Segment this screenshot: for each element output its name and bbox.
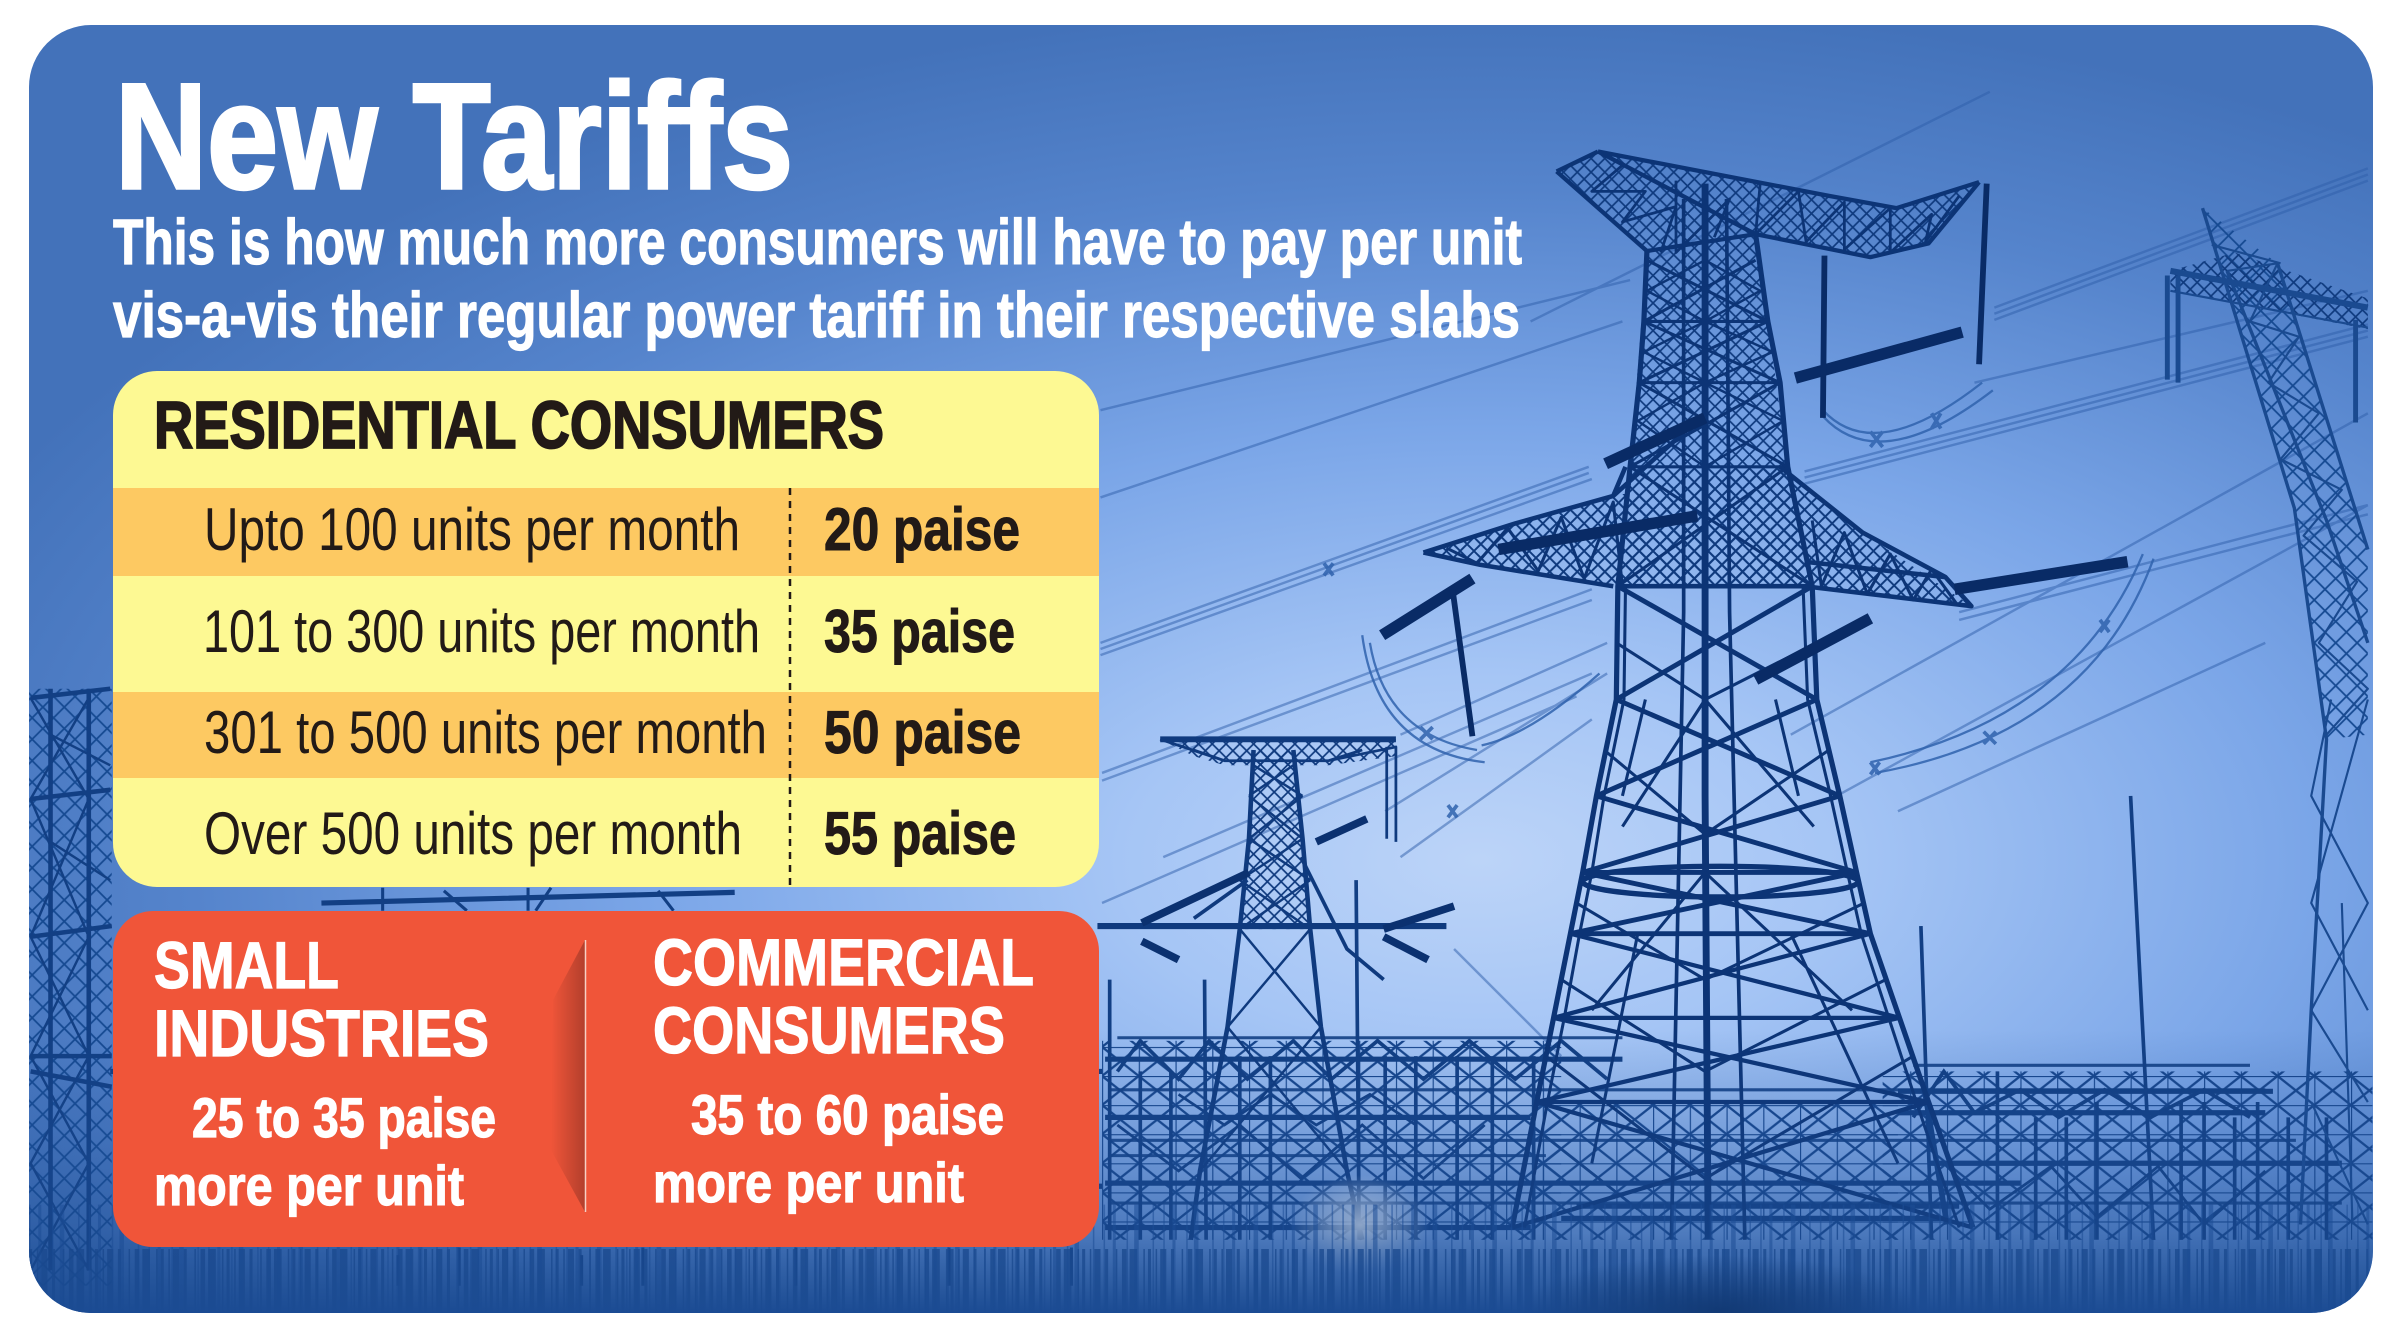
- ground glow: [1295, 1178, 1425, 1264]
- row: 101 to 300 units: 35 paise: [824, 598, 1015, 665]
- fold divider: [551, 940, 586, 1212]
- dashed column divider: [789, 488, 791, 887]
- small industries rate: more per unit: [154, 1154, 464, 1217]
- title: New Tariffs: [115, 52, 793, 220]
- subtitle: This is how much more consumers will have to pay per unit: [113, 206, 1522, 278]
- commercial consumers rate: [653, 1083, 1004, 1214]
- row: 101 to 300 units: 101 to 300 units per month: [203, 598, 760, 665]
- subtitle: vis-a-vis their regular power tariff in their respective slabs: [113, 279, 1520, 351]
- commercial consumers rate: more per unit: [653, 1151, 964, 1214]
- second smaller tower: [1097, 739, 1454, 1240]
- tower dense latticework: [1423, 152, 1979, 606]
- small industries rate: 25 to 35 paise: [192, 1086, 496, 1149]
- small industries heading: SMALL: [154, 928, 339, 1002]
- small industries heading: [154, 928, 489, 1070]
- panel: small industries and commercial consumers: [113, 911, 1099, 1247]
- row: up to 100 units: 20 paise: [824, 496, 1020, 563]
- row: up to 100 units: Upto 100 units per month: [204, 496, 740, 563]
- row: over 500 units: 55 paise: [824, 800, 1016, 867]
- ground vegetation silhouette: [29, 1263, 2372, 1283]
- hanging rods: [1453, 184, 1987, 736]
- red card: [113, 911, 1099, 1247]
- commercial consumers heading: CONSUMERS: [653, 993, 1005, 1067]
- ground fade: [29, 1030, 2373, 1313]
- commercial consumers heading: [653, 925, 1034, 1067]
- left edge tower: [29, 689, 112, 1286]
- gantry behind the panels: [110, 888, 1102, 1286]
- right edge tower: [2167, 208, 2368, 1224]
- commercial consumers rate: 35 to 60 paise: [691, 1083, 1004, 1146]
- electrical substation gantries: [1102, 796, 2372, 1240]
- table background: [113, 371, 1099, 887]
- sagging insulator strings: [1324, 383, 2154, 817]
- tower legs: [1512, 234, 1973, 1228]
- dark base shadow: [1572, 1264, 1868, 1313]
- small industries heading: INDUSTRIES: [154, 996, 489, 1070]
- top cross arm: [1557, 152, 1979, 257]
- subtitle: [113, 206, 1522, 351]
- row: 301 to 500 units: 301 to 500 units per month: [204, 699, 767, 766]
- middle cross arm: [1423, 413, 1971, 606]
- insulator arms: [1382, 332, 2128, 680]
- panel: residential consumers table: [113, 371, 1099, 887]
- row: over 500 units: Over 500 units per month: [204, 800, 742, 867]
- orange row bands: [113, 488, 1099, 778]
- main transmission tower: [1382, 152, 2128, 1240]
- tower lattice bracing: [1618, 260, 1812, 586]
- power lines: [1101, 92, 2368, 1056]
- small industries rate: [154, 1086, 496, 1217]
- row: 301 to 500 units: 50 paise: [824, 699, 1021, 766]
- commercial consumers heading: COMMERCIAL: [653, 925, 1034, 999]
- table heading: RESIDENTIAL CONSUMERS: [154, 388, 884, 463]
